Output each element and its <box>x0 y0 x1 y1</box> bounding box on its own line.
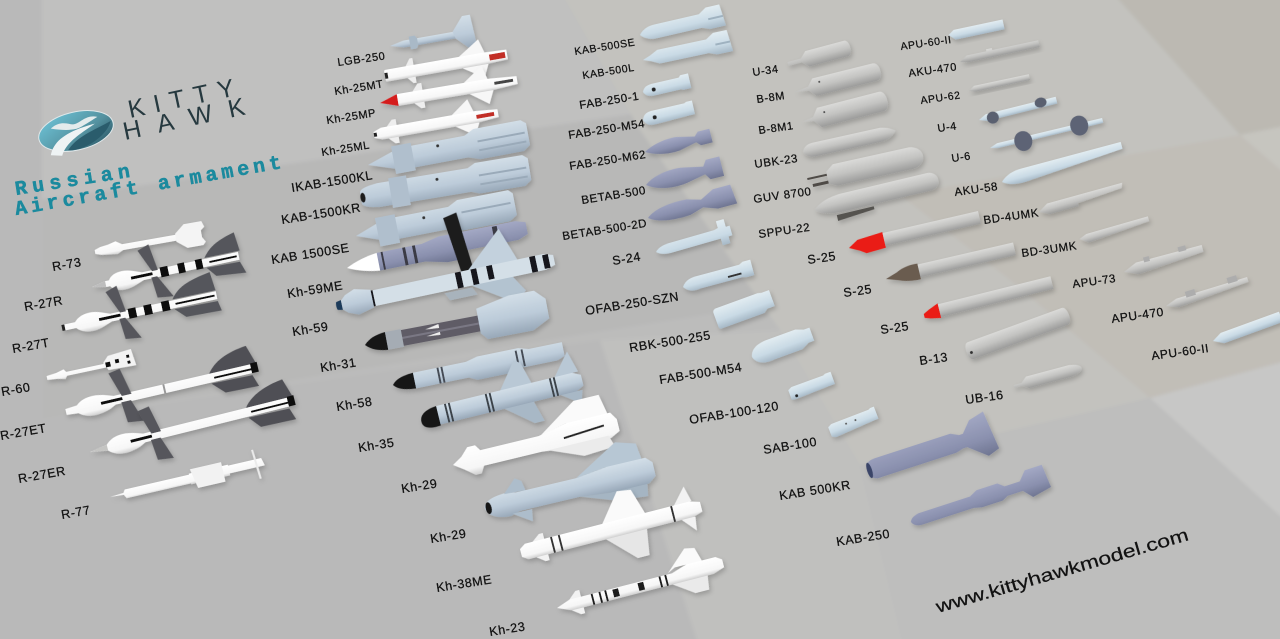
column 3 labels: KAB-500L <box>582 62 635 82</box>
weapon: U-4 <box>977 94 1058 127</box>
weapon: APU-62 <box>968 74 1030 93</box>
column 4 labels: B-8M <box>756 90 786 106</box>
logo: Kitty Hawk emblem <box>35 104 118 160</box>
weapon: Kh-58 <box>391 339 566 397</box>
column 2 labels <box>270 50 526 639</box>
column 2 labels: Kh-25MP <box>326 107 377 127</box>
column 4 labels <box>752 63 1004 407</box>
column 2 labels: KAB 1500SE <box>270 241 350 267</box>
weapon: KAB-1500L <box>365 119 531 180</box>
column 3 labels: S-24 <box>611 250 642 268</box>
weapon: FAB-250-1 <box>641 73 691 99</box>
weapon: S-25 (red tip) <box>922 275 1054 322</box>
weapon: KAB-500L <box>641 30 733 70</box>
column 1 labels: R-27ET <box>0 421 47 443</box>
column 5 labels: AKU-58 <box>954 181 999 199</box>
weapon: APU-60-I <box>948 19 1005 41</box>
weapon: S-25 (red nose) <box>847 210 982 257</box>
column 5 labels: U-4 <box>937 120 958 135</box>
weapon: APU-60-II <box>1211 312 1280 347</box>
column 5 labels: U-6 <box>951 150 972 165</box>
column 5 labels: APU-60-II <box>900 34 952 53</box>
column 3 labels <box>562 36 891 549</box>
weapon: KAB-1500KR <box>358 154 532 213</box>
column 5 labels: APU-60-II <box>1150 341 1210 363</box>
logo wordmark: KITTY HAWK: HAWK <box>120 93 248 146</box>
column 2 labels: Kh-25MT <box>334 78 384 98</box>
column 1 labels: R-27R <box>23 293 64 314</box>
weapon: Kh-59 <box>328 219 561 339</box>
weapon: Kh-25MP <box>377 60 520 122</box>
weapon: R-27T <box>56 265 224 353</box>
weapon: Kh-59ME <box>341 200 534 298</box>
weapon: B-8M1 <box>799 90 890 132</box>
weapon: RBK-500-255 <box>712 289 776 329</box>
column 5 labels: BD-3UMK <box>1021 240 1078 260</box>
weapon: APU-470 <box>1163 272 1250 311</box>
column 2 labels: Kh-59ME <box>286 278 344 301</box>
title: Russian Aircraft armament: Aircraft armament <box>13 152 283 222</box>
column 3 labels: KAB-250 <box>835 527 891 549</box>
column 3 labels: SAB-100 <box>762 435 818 457</box>
column 1 labels: R-27ER <box>17 464 67 486</box>
column 1 labels: R-27T <box>11 336 51 356</box>
column 5: launchers and pylons <box>948 19 1280 347</box>
weapon: UB-16 <box>1012 362 1083 392</box>
weapon: BETAB-500-2D <box>645 184 737 227</box>
weapon: LGB-250 <box>387 14 477 62</box>
weapon: Kh-29 (white) <box>445 392 623 486</box>
weapon: Kh-38ME <box>512 472 710 586</box>
column 3: bombs <box>637 4 1052 535</box>
title: Russian Aircraft armament: Russian <box>13 161 132 202</box>
column 3 labels: RBK-500-255 <box>628 328 712 355</box>
weapon: AKU-58 <box>1000 142 1124 188</box>
website url: www.kittyhawkmodel.com <box>932 525 1191 617</box>
weapon: SPPU-22 <box>813 171 942 226</box>
weapon: FAB-500-M54 <box>748 325 816 367</box>
column 4 labels: S-25 <box>806 249 837 267</box>
column 2 labels: KAB-1500KR <box>280 201 362 227</box>
weapon: R-60 <box>45 349 136 384</box>
column 3 labels: OFAB-250-SZN <box>584 289 680 318</box>
weapon: S-25 (brown nose) <box>884 241 1016 287</box>
column 4 labels: B-8M1 <box>758 120 794 137</box>
weapon: FAB-250-M62 <box>643 129 713 159</box>
column 2 labels: Kh-58 <box>335 394 373 414</box>
weapon: AKU-470 <box>959 38 1040 64</box>
column 1 labels: R-77 <box>60 503 92 522</box>
column 2 labels: Kh-59 <box>291 319 329 339</box>
column 5 labels: APU-73 <box>1072 273 1117 291</box>
weapon: Kh-29 (blue) <box>477 435 660 533</box>
column 4 labels: U-34 <box>752 63 779 79</box>
weapon: BETAB-500 <box>644 156 724 195</box>
weapon: U-6 <box>987 110 1105 159</box>
weapon: KAB-500SE <box>637 4 726 45</box>
column 5 labels: APU-470 <box>1110 305 1165 326</box>
weapon: OFAB-250-SZN <box>681 260 754 294</box>
column 3 labels: OFAB-100-120 <box>688 399 780 427</box>
column 2 labels: Kh-29 <box>429 526 467 546</box>
column 2 labels: IKAB-1500KL <box>290 168 374 195</box>
weapon: BD-4UMK <box>1037 183 1125 217</box>
column 4 labels: UB-16 <box>964 388 1004 407</box>
weapon: KAB-250 <box>907 464 1052 535</box>
column 1: air-to-air missiles <box>45 221 301 513</box>
column 3 labels: FAB-250-M54 <box>568 118 646 142</box>
column 4 labels: UBK-23 <box>754 153 799 171</box>
column 3 labels: FAB-500-M54 <box>658 360 743 387</box>
weapon: FAB-250-M54 <box>641 101 695 127</box>
weapon: Kh-25ML <box>371 94 501 153</box>
weapon: B-13 <box>963 306 1072 361</box>
column 2 labels: Kh-23 <box>488 619 526 639</box>
weapon: R-27R <box>86 226 248 312</box>
column 2 labels: Kh-31 <box>319 355 357 375</box>
column 3 labels: FAB-250-M62 <box>569 149 647 173</box>
column 3 labels: KAB 500KR <box>778 478 852 503</box>
weapon: B-8M <box>793 62 883 101</box>
weapon: S-24 <box>652 218 734 264</box>
weapon: KAB-1500SE <box>353 189 518 251</box>
column 1 labels: R-60 <box>0 380 32 399</box>
column 3 labels: BETAB-500 <box>581 185 647 207</box>
column 4 labels: GUV 8700 <box>753 186 812 206</box>
column 5 labels: BD-4UMK <box>983 207 1040 227</box>
weapon: U-34 <box>786 40 852 72</box>
weapon: UBK-23 <box>801 125 897 159</box>
column 2: air-to-surface missiles <box>328 14 729 627</box>
weapon: R-77 <box>107 448 268 513</box>
weapon: R-27ET <box>59 338 264 437</box>
weapon: R-73 <box>93 221 207 264</box>
column 5 labels: AKU-470 <box>908 61 958 80</box>
column 2 labels: Kh-29 <box>400 476 438 496</box>
weapon: GUV 8700 <box>805 145 925 192</box>
weapon: R-27ER <box>83 372 301 477</box>
weapon: SAB-100 <box>827 407 879 439</box>
column 3 labels: FAB-250-1 <box>579 91 640 112</box>
column 2 labels: LGB-250 <box>337 50 386 69</box>
weapon: Kh-35 <box>412 346 589 449</box>
weapon: Kh-23 <box>551 540 729 627</box>
column 4: pods and rockets <box>786 40 1083 392</box>
logo wordmark: KITTY HAWK: KITTY <box>125 74 237 124</box>
weapon: KAB 500KR <box>861 410 1000 493</box>
column 2 labels: Kh-25ML <box>321 139 371 159</box>
column 1 labels <box>0 255 92 522</box>
weapon: Kh-31 <box>361 289 551 362</box>
column 1 labels: R-73 <box>51 255 83 274</box>
column 5 labels: APU-62 <box>920 89 961 107</box>
column 2 labels: Kh-35 <box>357 435 395 455</box>
column 4 labels: B-13 <box>918 350 949 368</box>
column 3 labels: BETAB-500-2D <box>562 218 648 243</box>
column 4 labels: S-25 <box>879 319 910 337</box>
weapon: Kh-25MT <box>382 35 510 95</box>
column 2 labels: Kh-38ME <box>435 572 493 595</box>
weapon: APU-73 <box>1121 241 1205 278</box>
column 3 labels: KAB-500SE <box>574 36 636 58</box>
weapon: OFAB-100-120 <box>787 372 835 401</box>
column 5 labels <box>900 34 1210 363</box>
column 4 labels: S-25 <box>842 282 873 300</box>
weapon: BD-3UMK <box>1079 216 1150 245</box>
column 4 labels: SPPU-22 <box>758 222 811 241</box>
